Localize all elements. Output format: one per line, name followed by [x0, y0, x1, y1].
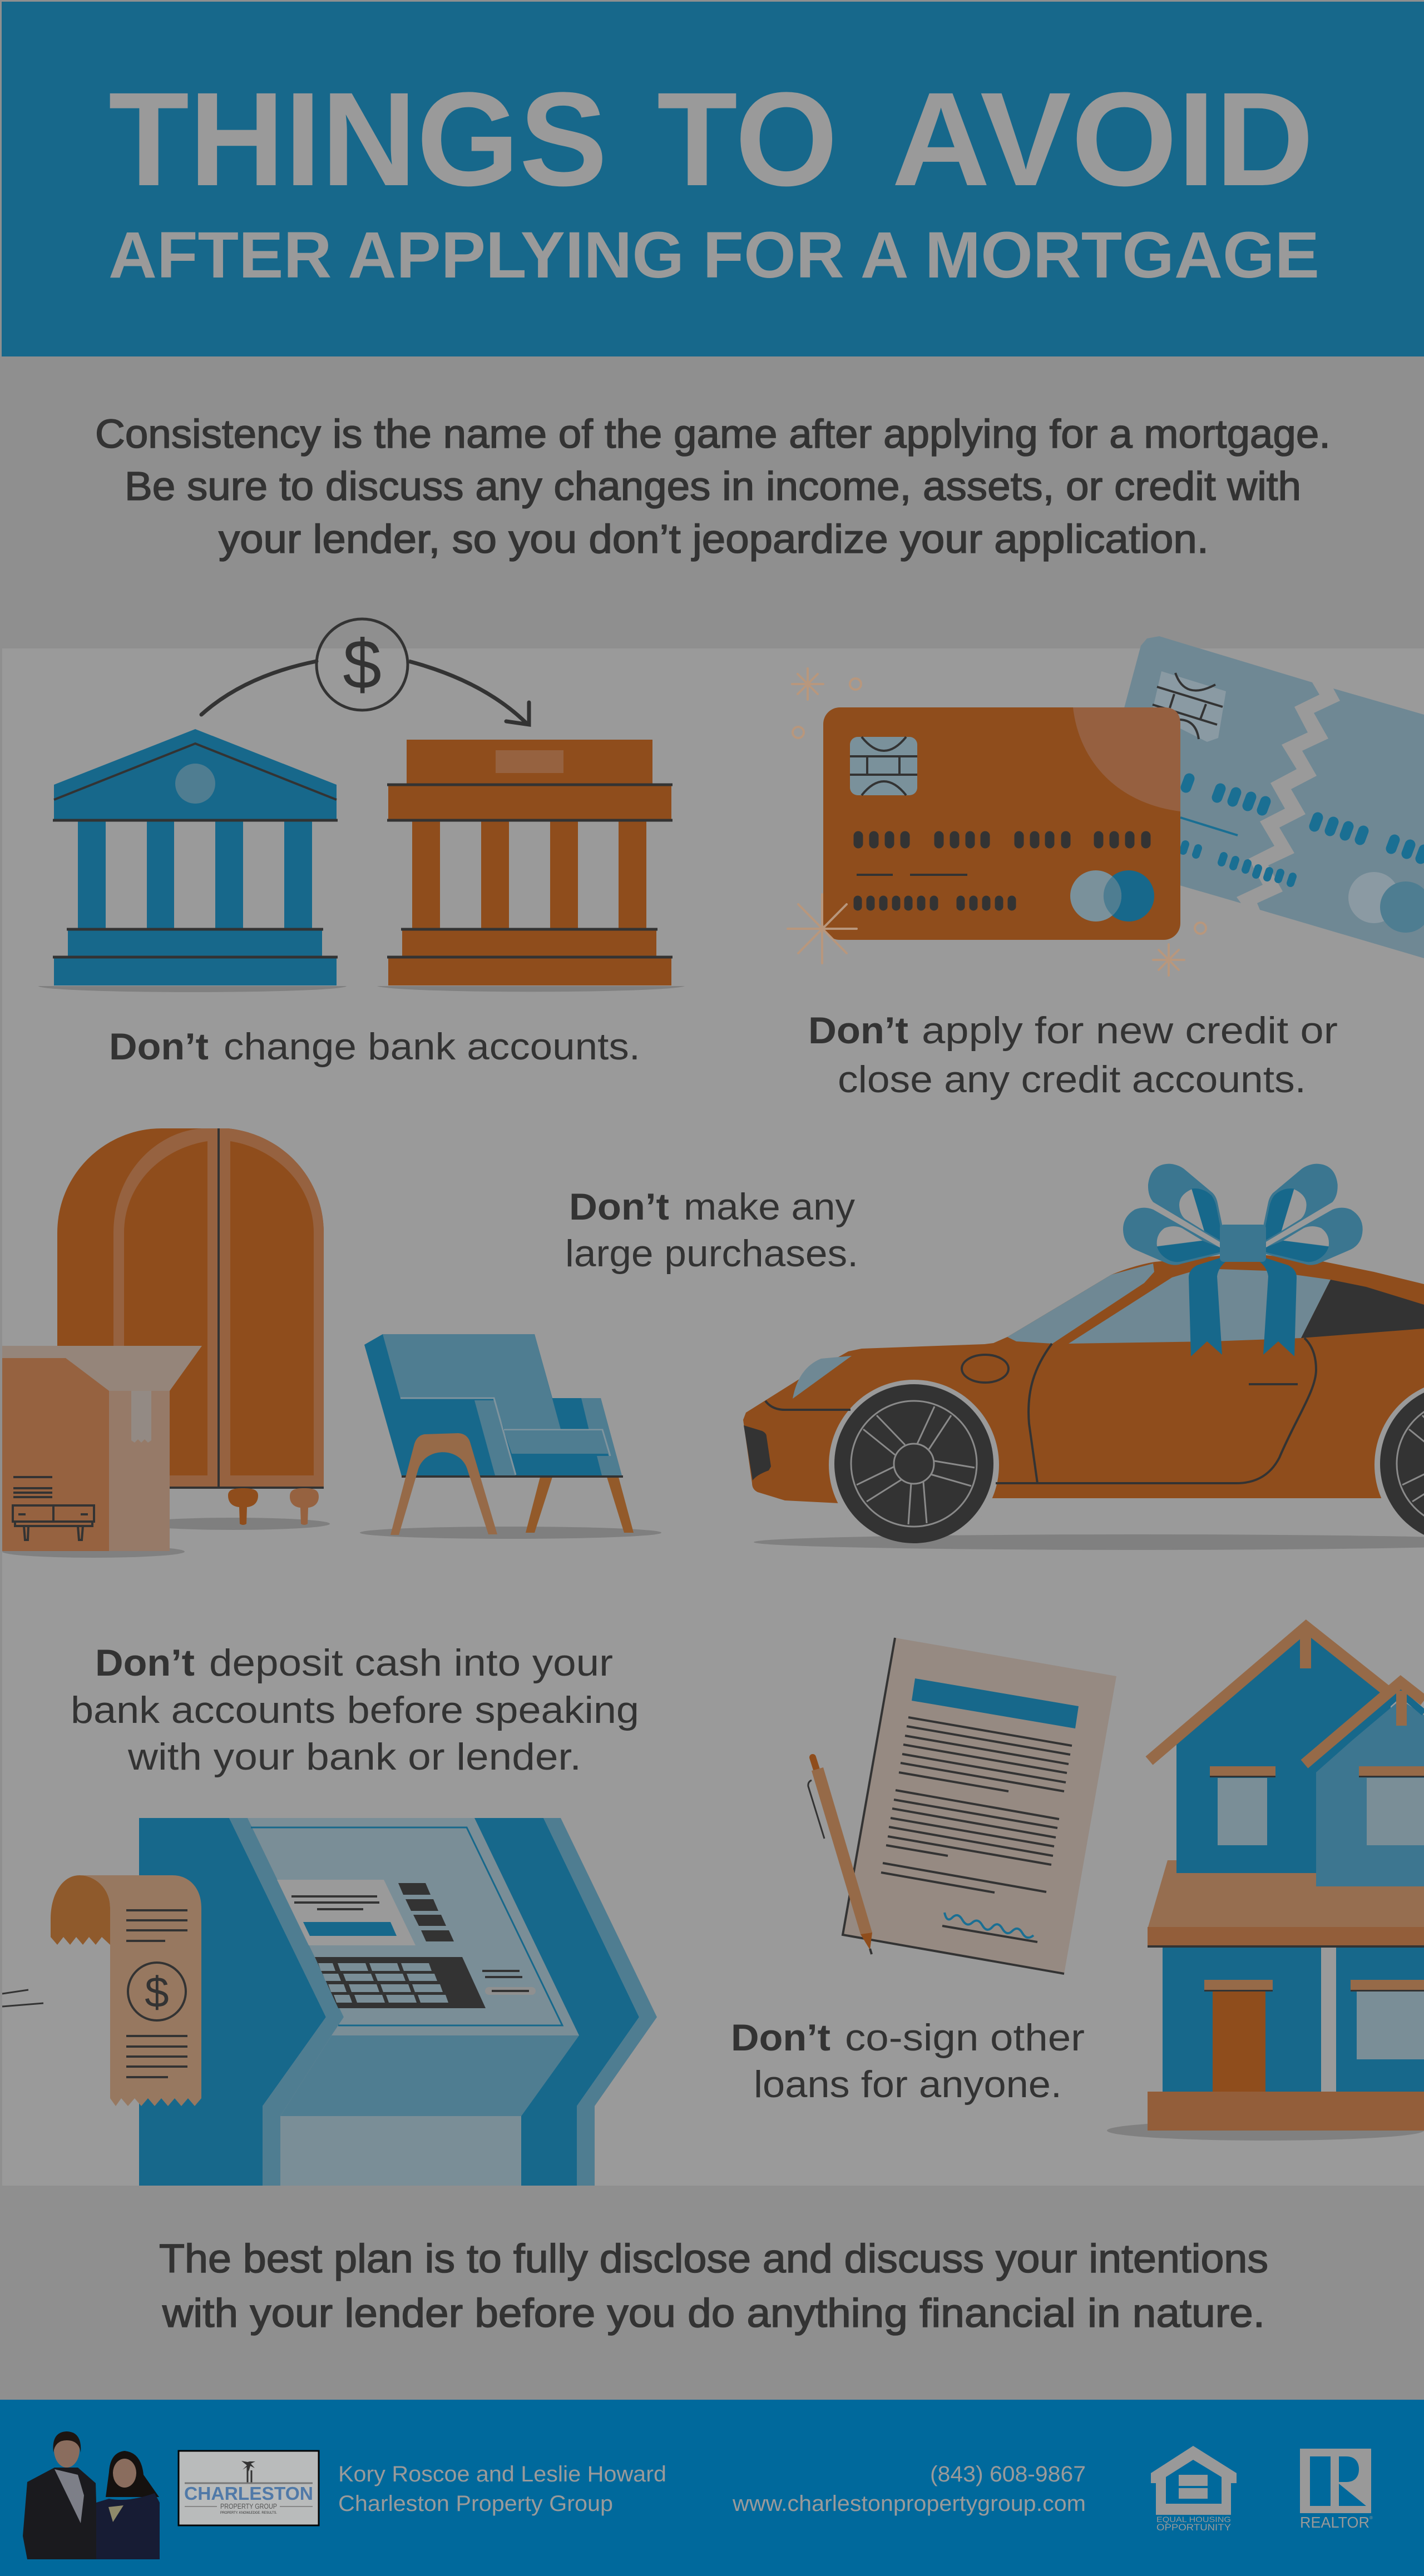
icon: signed document and pen: [808, 1638, 1116, 1974]
intro text block: [95, 412, 1331, 562]
icon: armchair: [360, 1334, 661, 1539]
icon: moving box: [2, 1346, 202, 1558]
panel: large purchases: [2, 1128, 1424, 1558]
caption: co-sign loans: Don’t: [731, 2017, 830, 2059]
icon: sparkles: [788, 668, 1206, 975]
panel: footer: [0, 2400, 1424, 2576]
contact details: [732, 2462, 1086, 2516]
caption: deposit cash: Don’t: [95, 1642, 195, 1684]
caption: deposit cash: [71, 1642, 639, 1778]
caption: credit accounts: close any credit accounts.: [838, 1058, 1306, 1101]
panel: header banner: [2, 2, 1424, 356]
caption: change bank accounts: change bank accounts.: [224, 1026, 640, 1068]
caption: credit accounts: [808, 1009, 1338, 1101]
caption: deposit cash: with your bank or lender.: [127, 1736, 581, 1778]
icon: orange credit card: [823, 707, 1180, 940]
icon: orange bank: [377, 740, 685, 992]
contact details: www.charlestonpropertygroup.com: [732, 2491, 1086, 2516]
caption: credit accounts: apply for new credit or: [922, 1009, 1338, 1052]
logo: Charleston Property Group: PROPERTY GROUP: [220, 2502, 277, 2510]
caption: co-sign loans: loans for anyone.: [754, 2063, 1062, 2106]
caption: large purchases: make any: [684, 1186, 855, 1228]
contact details: (843) 608-9867: [930, 2462, 1086, 2486]
panel: credit cards: [788, 636, 1424, 1101]
panel: co-sign loans: [731, 1627, 1424, 2141]
agent names: Kory Roscoe and Leslie Howard: [338, 2462, 666, 2486]
arrow: money transfer between banks: $: [343, 626, 382, 704]
icon: equal housing opportunity: EQUAL HOUSING: [1156, 2515, 1231, 2524]
panel: deposit cash: [2, 1642, 657, 2186]
icon: blue bank: [38, 729, 347, 992]
icon: gift bow: [1123, 1164, 1363, 1356]
caption: large purchases: [565, 1186, 858, 1275]
icon: realtor: REALTOR: [1300, 2514, 1369, 2531]
caption: co-sign loans: [731, 2017, 1085, 2106]
caption: deposit cash: deposit cash into your: [209, 1642, 613, 1684]
title: AVOID: [892, 65, 1314, 214]
icon: realtor: [1300, 2449, 1373, 2531]
arrow: money transfer between banks: [201, 619, 529, 725]
caption: large purchases: large purchases.: [565, 1232, 858, 1275]
photo: two agents: [23, 2431, 160, 2559]
title: TO: [657, 65, 838, 214]
agent names: Charleston Property Group: [338, 2491, 613, 2516]
title: [108, 65, 1314, 214]
title: THINGS: [108, 65, 607, 214]
logo: Charleston Property Group: PROPERTY. KNOWLEDGE. RESULTS.: [220, 2511, 277, 2515]
icon: equal housing opportunity: [1151, 2446, 1237, 2533]
icon: ATM machine: [139, 1818, 657, 2186]
caption: deposit cash: bank accounts before speaking: [71, 1689, 639, 1731]
intro text block: your lender, so you don’t jeopardize your application.: [219, 517, 1209, 562]
agent names: [338, 2462, 666, 2516]
icon: receipt: [2, 1875, 201, 2106]
icon: equal housing opportunity: OPPORTUNITY: [1156, 2522, 1231, 2533]
logo: Charleston Property Group: [179, 2451, 319, 2525]
subtitle: AFTER APPLYING FOR A MORTGAGE: [108, 219, 1319, 292]
icon: realtor: ®: [1369, 2515, 1373, 2520]
icon: car with bow: [743, 1164, 1424, 1550]
caption: credit accounts: Don’t: [808, 1009, 908, 1052]
icon: houses: [1107, 1627, 1424, 2141]
caption: large purchases: Don’t: [569, 1186, 669, 1228]
closing text block: [0, 2186, 1424, 2400]
icon: wardrobe: [57, 1128, 330, 1530]
closing text block: with your lender before you do anything financial in nature.: [162, 2291, 1265, 2336]
intro text block: Consistency is the name of the game after applying for a mortgage.: [95, 412, 1331, 457]
closing text block: The best plan is to fully disclose and discuss your intentions: [159, 2237, 1268, 2281]
intro text block: Be sure to discuss any changes in income, assets, or credit with: [125, 464, 1301, 509]
icon: receipt: $: [145, 1968, 169, 2017]
logo: Charleston Property Group: CHARLESTON: [184, 2483, 313, 2504]
panel: change bank accounts: [38, 619, 685, 1068]
caption: co-sign loans: co-sign other: [845, 2017, 1085, 2059]
caption: change bank accounts: Don’t: [109, 1026, 209, 1068]
icon: torn credit card: [1124, 636, 1424, 958]
